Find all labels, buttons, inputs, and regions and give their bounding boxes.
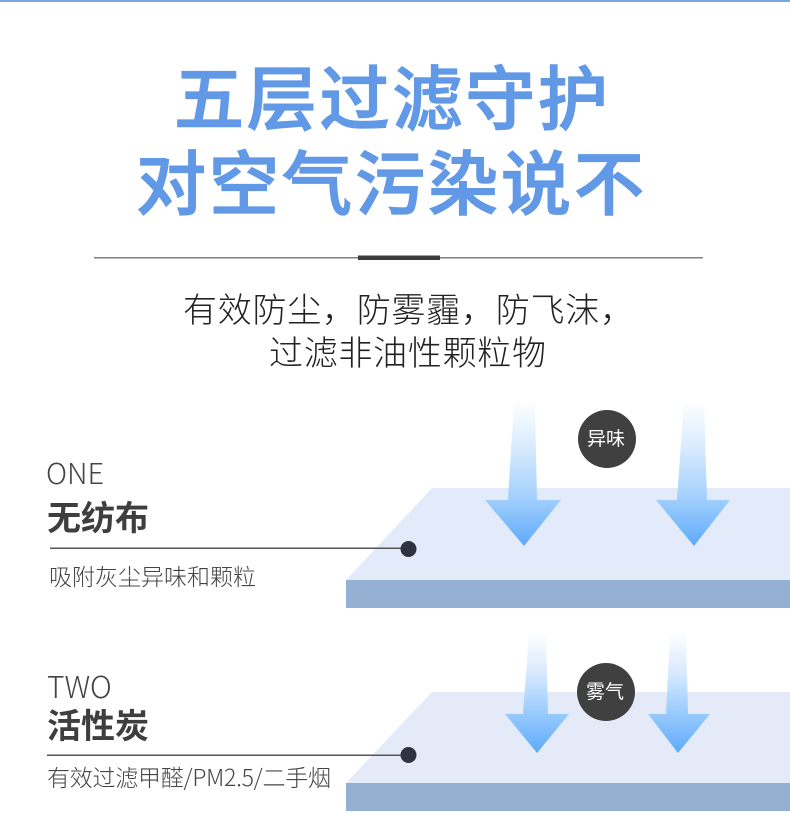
panel: layer two illustration: [346, 633, 790, 811]
panel: layer one illustration: [346, 400, 790, 608]
leader line and dot: [50, 541, 416, 557]
leader line and dot: [47, 747, 416, 763]
badge: mist: 雾气: [586, 681, 624, 703]
top accent bar: [0, 0, 790, 2]
label description: 有效过滤甲醛/PM2.5/二手烟: [47, 759, 331, 793]
label name: 活性炭: [47, 708, 149, 746]
label number: TWO: [47, 663, 112, 707]
arrow: left down arrow, layer one: [485, 400, 561, 546]
label name: 无纺布: [47, 500, 149, 538]
arrow: right down arrow, layer one: [656, 400, 730, 546]
badge: odor: [578, 410, 636, 468]
divider: [94, 256, 703, 260]
panel: layer two label: [47, 663, 416, 793]
filter plate two: [346, 692, 790, 811]
subtitle: [183, 283, 634, 375]
panel: layer one label: [46, 451, 416, 590]
arrow: right down arrow, layer two: [648, 633, 710, 753]
badge: mist: [577, 663, 635, 721]
title: [136, 44, 644, 230]
badge: odor: 异味: [587, 428, 625, 450]
arrow: left down arrow, layer two: [505, 633, 569, 753]
label number: ONE: [46, 451, 104, 493]
subtitle: 有效防尘，防雾霾，防飞沫，: [183, 283, 634, 332]
subtitle: 过滤非油性颗粒物: [269, 326, 546, 375]
filter plate one: [346, 488, 790, 608]
title: 对空气污染说不: [136, 129, 644, 230]
title: 五层过滤守护: [174, 44, 608, 145]
label description: 吸附灰尘异味和颗粒: [49, 564, 256, 590]
